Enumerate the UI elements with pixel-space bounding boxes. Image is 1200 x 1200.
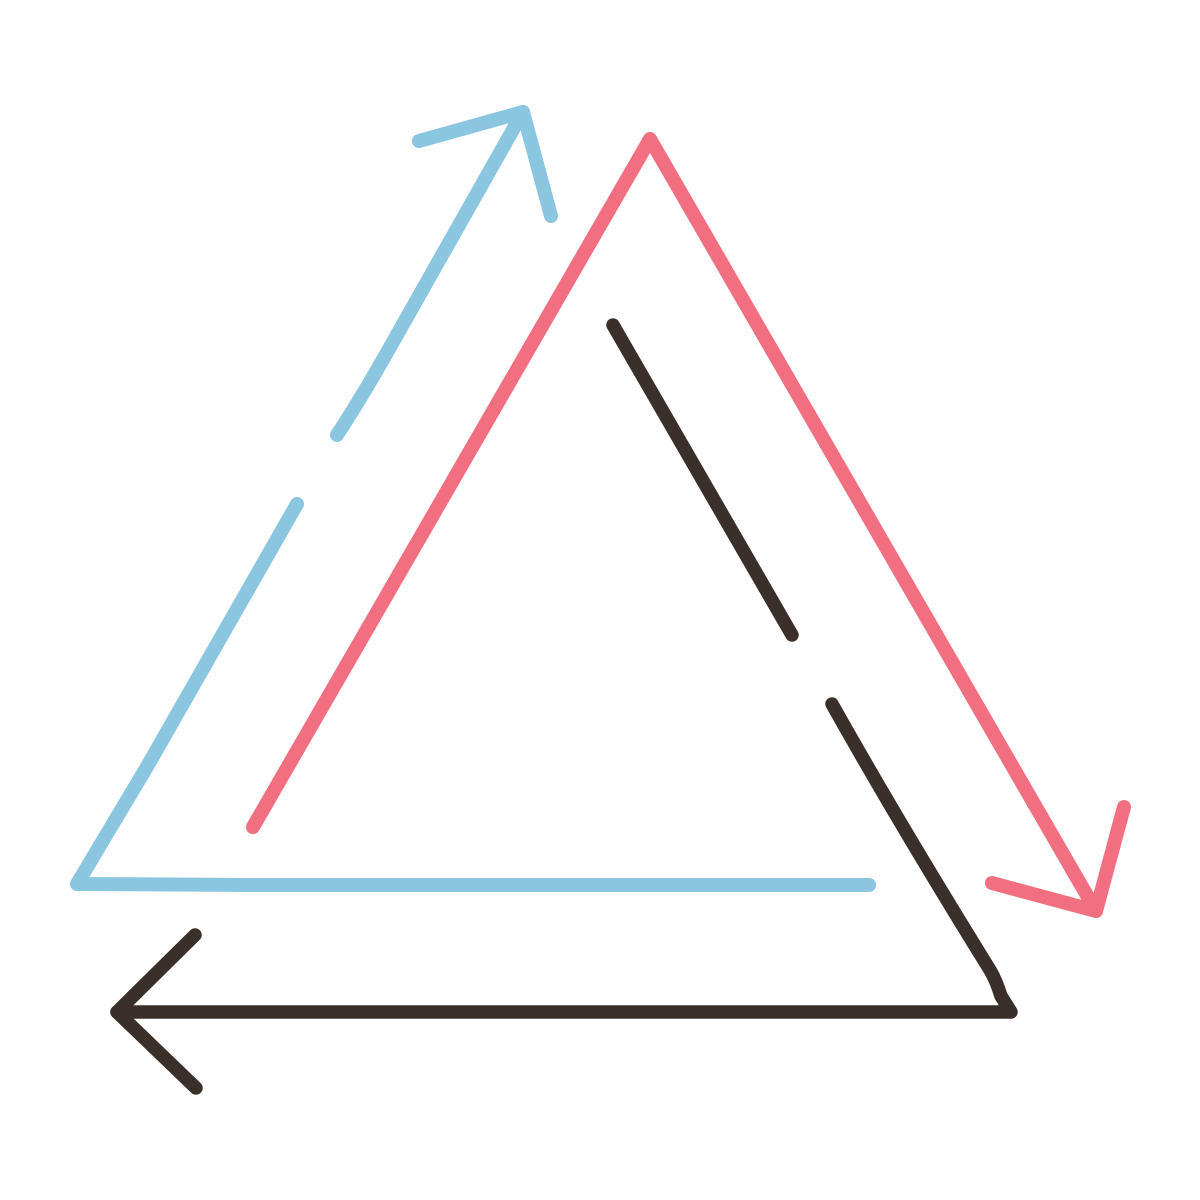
arrow: blue [77,112,869,885]
arrow: dark [117,325,1011,1088]
arrow: pink [253,139,1124,911]
